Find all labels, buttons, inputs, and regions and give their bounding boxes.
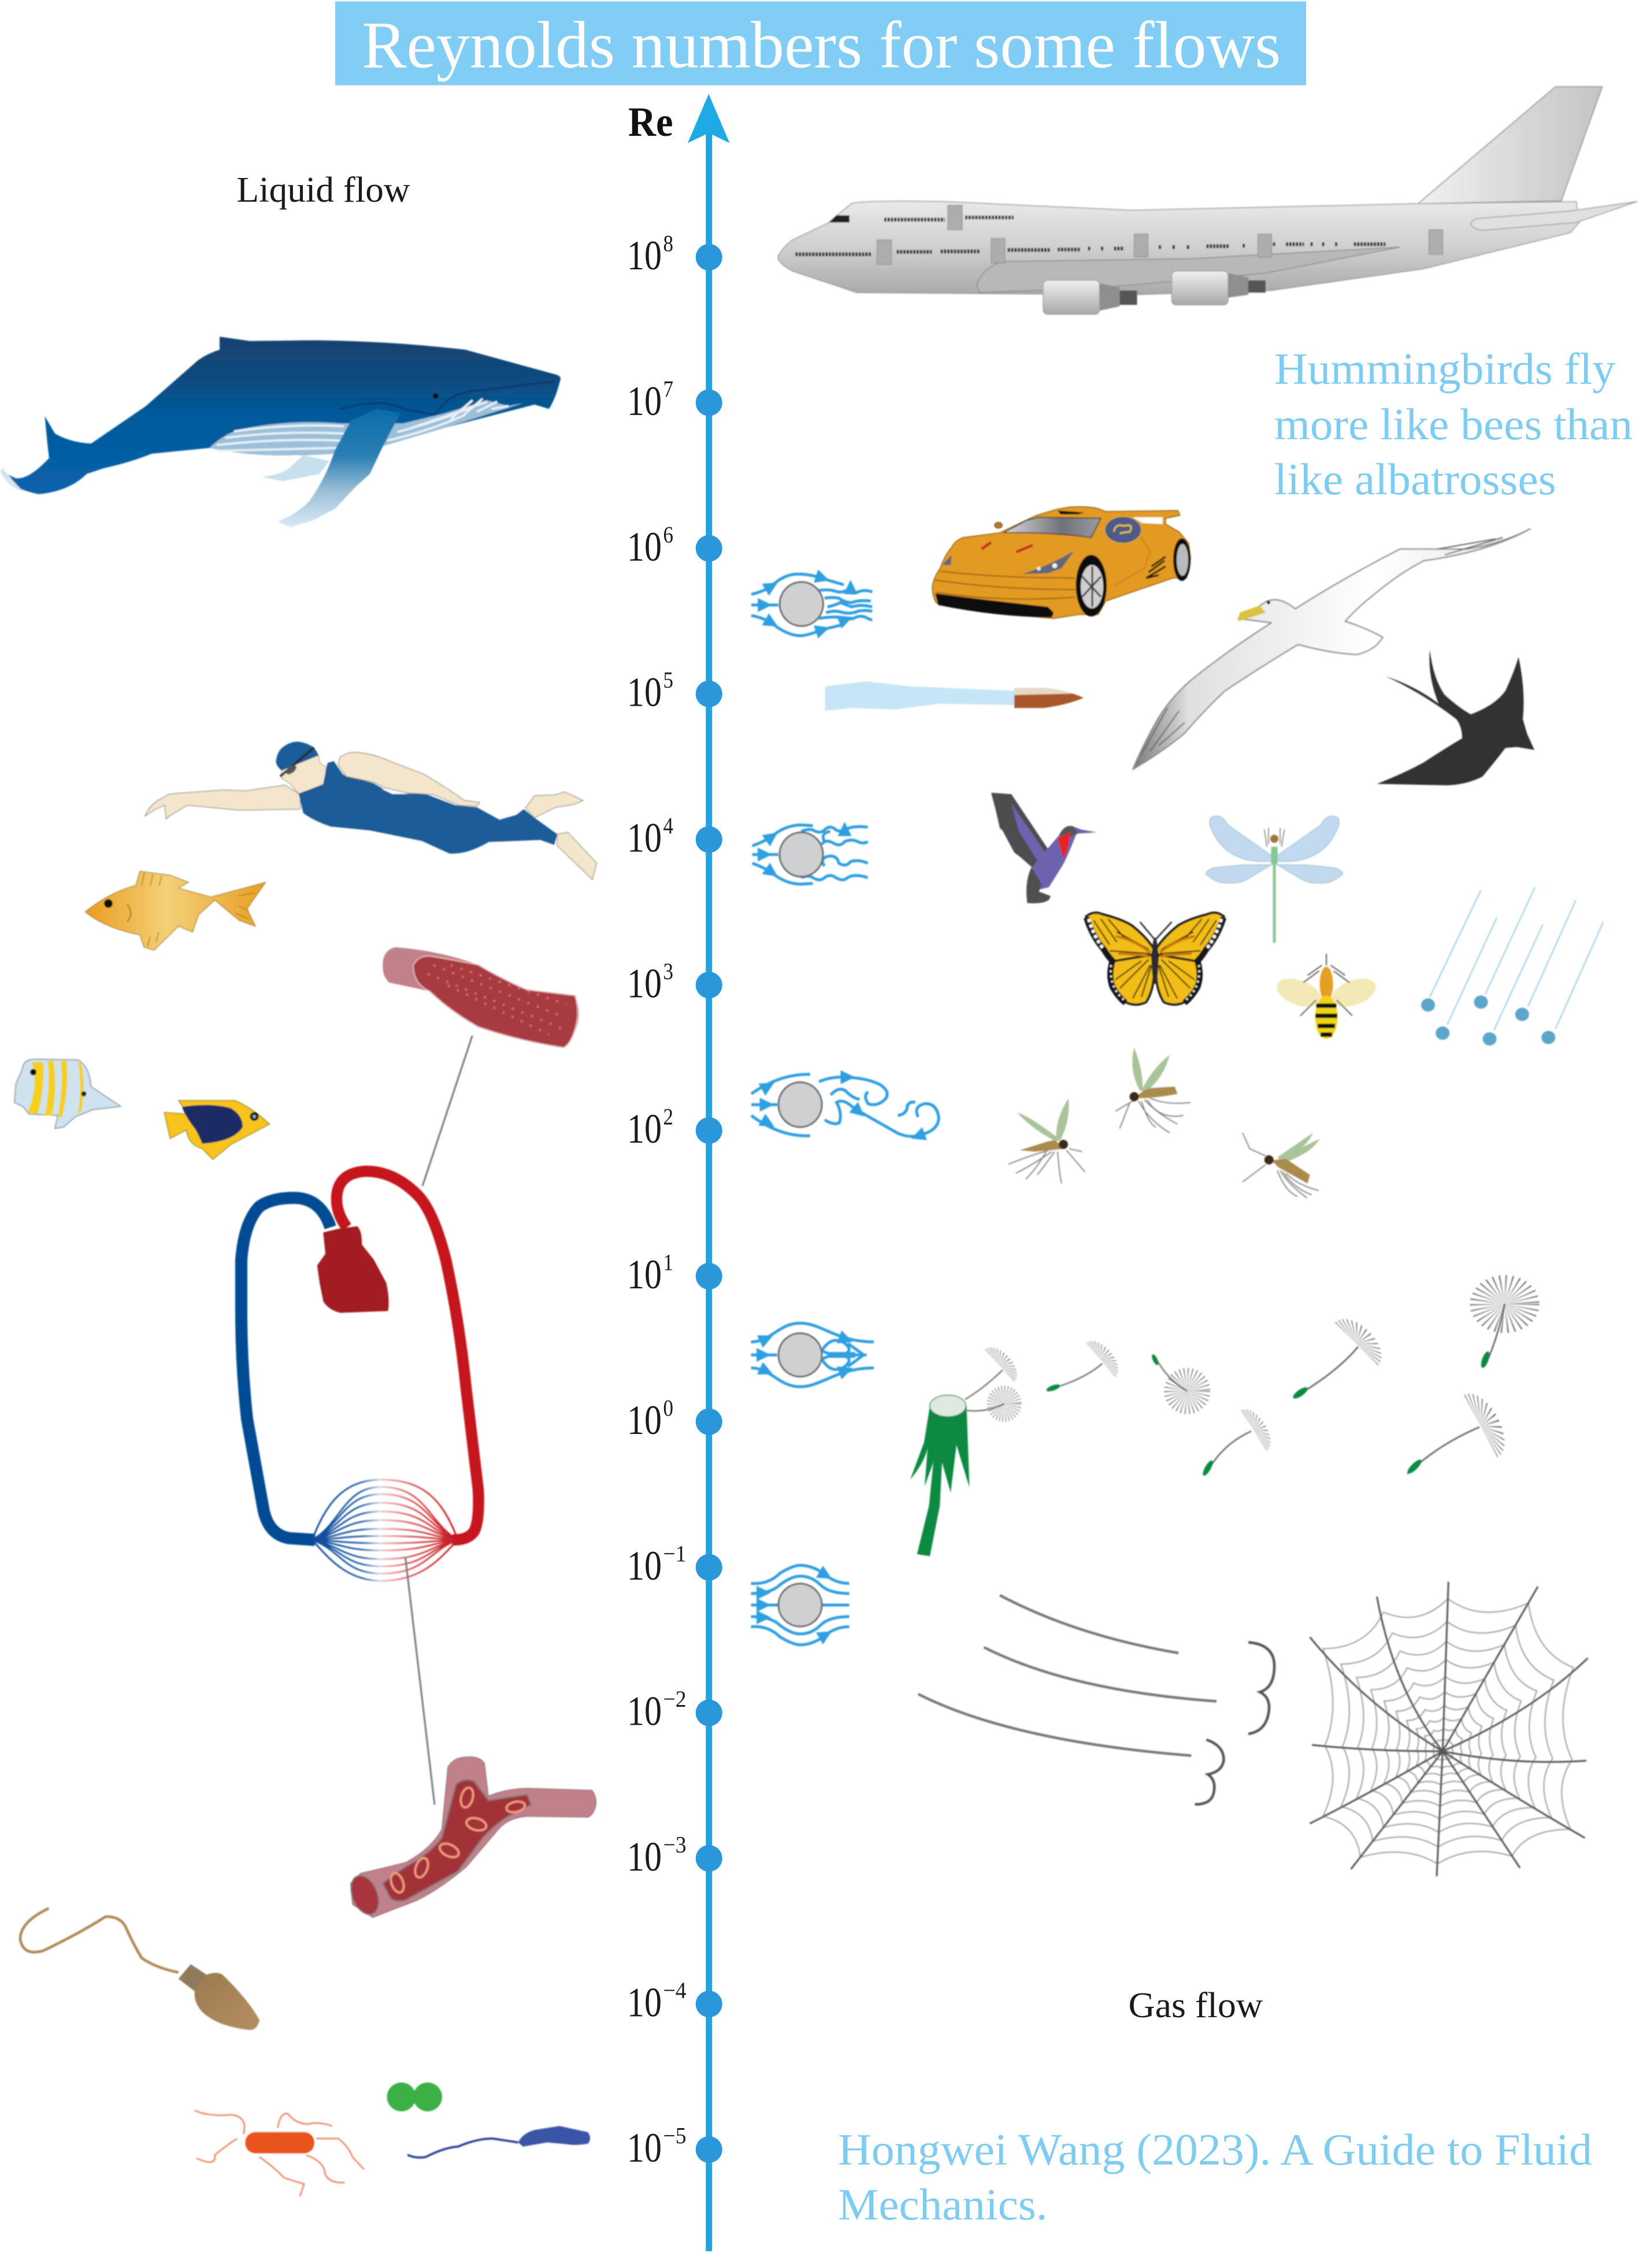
engines	[1043, 271, 1266, 314]
icon: albatross	[1133, 529, 1530, 769]
heart	[318, 1228, 388, 1312]
tick labels: −3	[663, 1832, 686, 1858]
seed 5	[1292, 1327, 1374, 1400]
tick labels: 10	[627, 1833, 662, 1880]
tick labels: 10	[627, 2124, 662, 2171]
icon: hummingbird	[991, 793, 1097, 903]
seed 8	[1406, 1406, 1497, 1476]
body	[932, 507, 1191, 618]
tick labels: 10	[627, 232, 662, 279]
icon: dragonfly	[1206, 816, 1343, 943]
icon: jumbo jet airliner	[778, 87, 1637, 314]
tick labels: 5	[663, 667, 673, 693]
tick labels: 10	[627, 1542, 662, 1589]
tick labels: 10	[627, 814, 662, 861]
trailing arm	[338, 752, 480, 806]
panel: liquid flow examples	[0, 337, 596, 2196]
flow pattern: vortex street at Re 10^2	[751, 1073, 939, 1142]
wheels	[1076, 555, 1107, 617]
citation: Hongwei Wang (2023). A Guide to Fluid	[838, 2125, 1592, 2174]
citation: Mechanics.	[838, 2180, 1047, 2229]
tick labels: 10	[627, 959, 662, 1006]
icon: branching blood vessel	[346, 1757, 596, 1918]
panel: gas flow examples	[778, 87, 1637, 1876]
seed 6	[1479, 1289, 1522, 1369]
icon: orange sports car	[932, 507, 1191, 618]
heading: Liquid flow: Liquid flow	[236, 169, 410, 210]
panel: flow patterns around a cylinder	[751, 572, 939, 1645]
tick labels: 10	[627, 523, 662, 570]
vein	[242, 1198, 331, 1540]
swim cap	[276, 742, 318, 770]
tick labels: −4	[663, 1977, 686, 2003]
tick labels: 0	[663, 1395, 673, 1421]
tick labels: 6	[663, 521, 673, 547]
face	[282, 755, 326, 794]
artery	[336, 1171, 479, 1540]
tick labels: −1	[663, 1540, 686, 1566]
flow pattern: attached vortices at Re 10^0	[751, 1323, 874, 1387]
flow pattern: turbulent wake at Re 10^6	[751, 572, 872, 636]
tick labels: −2	[663, 1686, 686, 1712]
tick labels: 2	[663, 1104, 673, 1130]
tick markers	[696, 244, 722, 2163]
mosquito right	[1243, 1133, 1320, 1198]
tick labels: 10	[627, 377, 662, 424]
axis title: Re	[628, 98, 673, 145]
icon: goldfish	[86, 872, 266, 950]
callout: hummingbird note: Hummingbirds fly	[1274, 344, 1615, 394]
Reynolds number axis	[627, 94, 729, 2251]
title banner: Reynolds numbers for some flows	[362, 8, 1281, 81]
seed 4	[1151, 1354, 1199, 1403]
icon: green diplococcus	[387, 2082, 442, 2111]
tick labels: 10	[627, 1978, 662, 2025]
tick labels: 10	[627, 1251, 662, 1298]
flow pattern: creeping flow at Re 10^-1	[751, 1565, 849, 1645]
icon: wind lines	[918, 1595, 1274, 1804]
heading: Gas flow: Gas flow	[1128, 1985, 1263, 2025]
tick labels: 1	[663, 1250, 673, 1276]
icon: bee	[1273, 954, 1380, 1039]
red blood cells	[388, 1787, 526, 1894]
side window	[1104, 517, 1141, 543]
callout: hummingbird note	[1274, 344, 1633, 504]
headlights	[1022, 551, 1074, 574]
callout: hummingbird note: more like bees than	[1274, 399, 1633, 449]
tick labels: 10	[627, 1688, 662, 1735]
icon: swallow	[1377, 650, 1534, 785]
mosquito left	[1008, 1098, 1085, 1184]
icon: artery cross-section	[383, 947, 579, 1047]
icon: butterflyfish	[14, 1059, 121, 1128]
wing	[977, 247, 1400, 292]
icon: monarch butterfly	[1086, 913, 1224, 1005]
icon: spider web	[1310, 1582, 1588, 1876]
connector: capillaries to vessel	[406, 1558, 435, 1804]
axis arrowhead	[688, 94, 729, 143]
side vent	[1146, 557, 1166, 578]
windshield	[1004, 517, 1101, 538]
icon: sperm cell	[20, 1908, 259, 2030]
tick labels: 7	[663, 376, 673, 402]
tick labels: 3	[663, 958, 673, 984]
axis line	[708, 130, 710, 2251]
flow pattern: wake at Re 10^4	[752, 825, 867, 884]
citation	[838, 2125, 1592, 2229]
tick labels: 8	[663, 231, 673, 257]
mosquito top	[1115, 1047, 1191, 1133]
icon: swimmer	[145, 742, 596, 880]
feet	[525, 792, 583, 818]
tick labels: 4	[663, 813, 673, 839]
icon: dandelion seed head stem	[910, 1395, 970, 1556]
tick labels: −5	[663, 2122, 686, 2148]
callout: hummingbird note: like albatrosses	[1274, 454, 1556, 504]
leading arm	[145, 785, 301, 819]
icon: speeding bullet with wake	[825, 681, 1084, 711]
capillary bed	[312, 1480, 458, 1581]
tick labels: 10	[627, 1105, 662, 1152]
connector: artery to circulation	[422, 1036, 472, 1186]
windows	[795, 217, 1386, 254]
seed 1	[965, 1353, 1011, 1399]
icon: blue and yellow angelfish	[164, 1100, 269, 1159]
icon: humpback whale	[0, 337, 561, 528]
icon: red flagellated bacterium	[195, 2111, 364, 2196]
diagram: blood circulation loop	[242, 1171, 479, 1581]
seed 3	[1045, 1347, 1113, 1393]
tick labels	[627, 231, 687, 2171]
seed 2	[965, 1395, 1013, 1413]
tick labels: 10	[627, 1396, 662, 1443]
icon: dandelion seeds	[965, 1289, 1522, 1477]
icon: mosquitoes	[1008, 1047, 1320, 1198]
icon: raindrops	[1421, 887, 1603, 1046]
doors	[877, 205, 1443, 265]
seed 7	[1201, 1417, 1266, 1477]
swim suit	[299, 761, 557, 854]
icon: blue bacterium	[407, 2126, 590, 2158]
tick labels: 10	[627, 669, 662, 716]
